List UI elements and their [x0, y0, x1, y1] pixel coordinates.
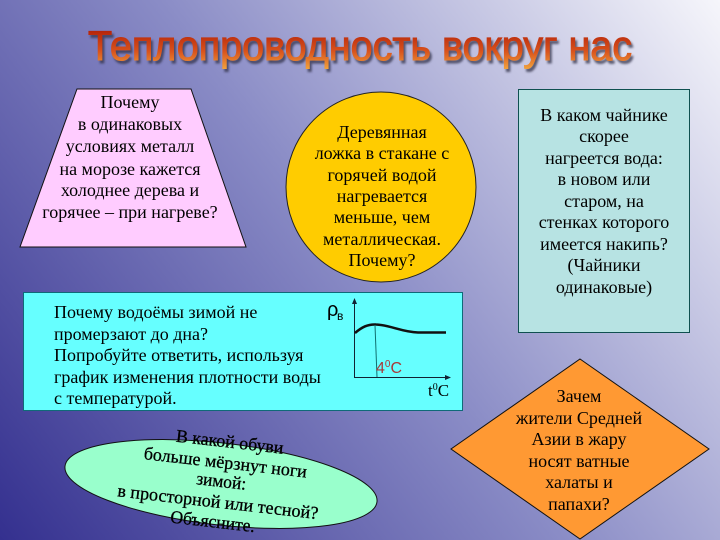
chart: water density vs temperature [327, 298, 451, 400]
chart: water density vs temperature: C [438, 381, 449, 400]
question text: Почему водоёмы зимой не [54, 302, 257, 322]
panel: orange diamond question: Азии в жару [531, 429, 627, 449]
panel: kettle question: имеется накипь? [540, 234, 668, 254]
panel: pink trapezoid question: на морозе кажется [59, 159, 201, 179]
chart: water density vs temperature: в [337, 309, 343, 323]
panel: orange diamond question: жители Средней [515, 408, 642, 428]
panel: green tilted ellipse question: Объясните. [169, 507, 256, 536]
question text: график изменения плотности воды [54, 367, 321, 387]
panel: green tilted ellipse question: В какой обуви [175, 426, 285, 458]
panel: orange diamond question [451, 359, 709, 539]
panel: yellow circle question [286, 92, 476, 282]
panel: orange diamond question: папахи? [548, 494, 610, 514]
panel: green tilted ellipse question: в просторной или тесной? [116, 480, 319, 523]
panel: kettle question: скорее [579, 126, 629, 146]
panel: kettle question: в новом или [558, 169, 651, 189]
question text: промерзают до дна? [54, 324, 208, 344]
panel: orange diamond question: носят ватные [528, 451, 630, 471]
question text: с температурой. [54, 388, 177, 408]
panel: pink trapezoid question: условиях металл [66, 136, 194, 156]
panel: yellow circle question: нагревается [337, 186, 427, 206]
panel: kettle question: В каком чайнике [540, 105, 668, 125]
panel: yellow circle question: меньше, чем [334, 207, 430, 227]
panel: green tilted ellipse question: больше мёрзнут ноги [143, 443, 308, 482]
panel: kettle question [518, 90, 690, 332]
panel: water density question [24, 292, 462, 410]
panel: yellow circle question: металлическая. [323, 229, 441, 249]
chart: water density vs temperature: 0 [433, 382, 438, 393]
panel: pink trapezoid question [20, 89, 246, 247]
panel: orange diamond question: халаты и [545, 472, 613, 492]
chart: water density vs temperature: 0 [385, 359, 391, 370]
panel: kettle question: нагреется вода: [545, 148, 663, 168]
panel: pink trapezoid question: Почему [101, 92, 159, 112]
chart: water density vs temperature: 4 [376, 360, 385, 377]
panel: yellow circle question: ложка в стакане с [315, 143, 449, 163]
panel: yellow circle question: Деревянная [337, 122, 427, 142]
title: Теплопроводность вокруг нас [88, 22, 632, 69]
panel: pink trapezoid question: горячее – при нагреве? [42, 202, 218, 222]
chart: water density vs temperature: ρ [327, 299, 338, 321]
question text [54, 302, 321, 408]
panel: kettle question: одинаковые) [556, 277, 652, 298]
panel: yellow circle question: Почему? [349, 250, 415, 270]
chart: water density vs temperature: t [428, 381, 433, 400]
panel: green tilted ellipse question [60, 414, 383, 540]
panel: kettle question: старом, на [564, 191, 644, 211]
title: Теплопроводность вокруг нас [90, 25, 634, 72]
panel: kettle question: (Чайники [568, 255, 641, 276]
chart: water density vs temperature: C [390, 360, 402, 377]
panel: kettle question: стенках которого [539, 212, 669, 232]
panel: orange diamond question: Зачем [557, 386, 601, 406]
panel: yellow circle question: горячей водой [327, 165, 437, 185]
panel: pink trapezoid question: в одинаковых [78, 114, 182, 134]
panel: green tilted ellipse question: зимой: [195, 468, 247, 494]
panel: pink trapezoid question: холоднее дерева и [61, 180, 200, 200]
question text: Попробуйте ответить, используя [54, 345, 303, 365]
